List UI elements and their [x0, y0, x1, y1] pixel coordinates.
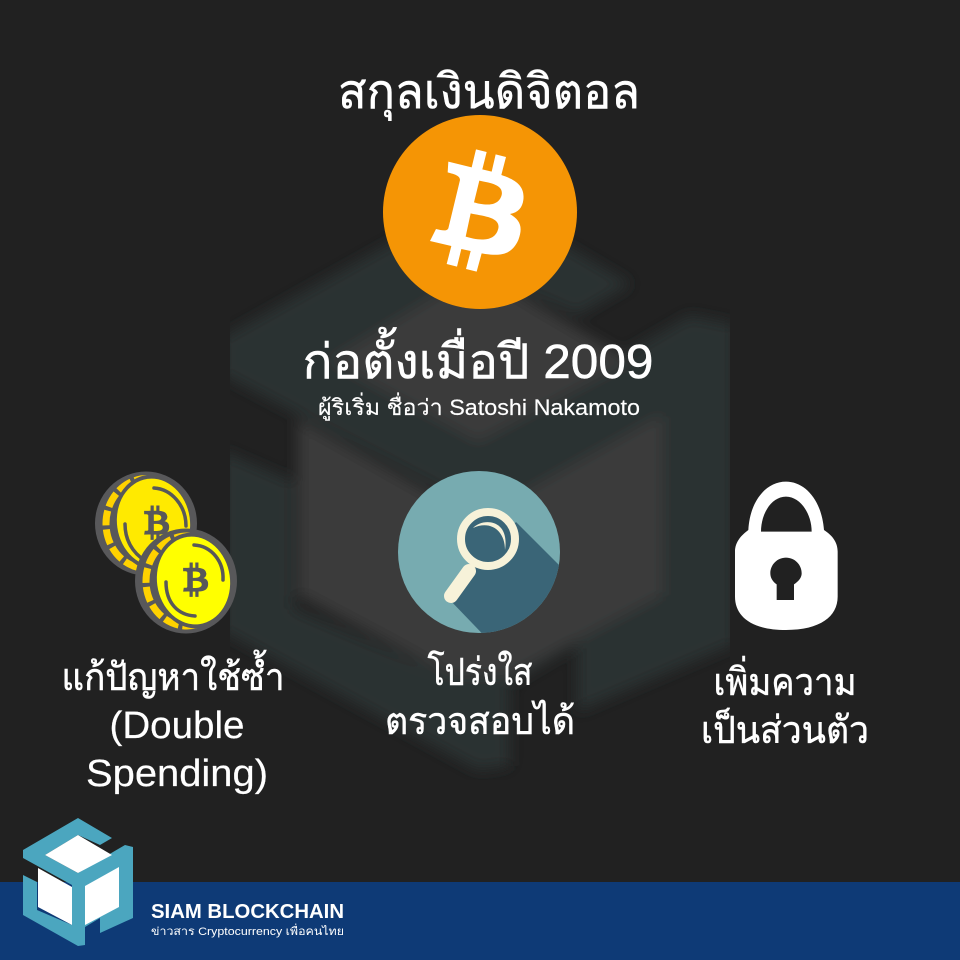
label: solves double spending: แก้ปัญหาใช้ซ้ำ: [62, 649, 284, 699]
footer text: [151, 901, 344, 938]
title: สกุลเงินดิจิตอล: [338, 66, 640, 121]
label: solves double spending: Spending): [86, 753, 268, 795]
panel: transparent: [385, 471, 575, 743]
background watermark: blurred cube logo: [230, 244, 730, 770]
label: solves double spending: [62, 649, 284, 795]
label: transparent, verifiable: [385, 650, 575, 743]
panel: double spending: [62, 469, 284, 795]
icon: magnifying glass: [398, 471, 560, 633]
label: increases privacy: เป็นส่วนตัว: [701, 707, 869, 752]
label: solves double spending: (Double: [110, 705, 244, 747]
footer text: ข่าวสาร Cryptocurrency เพื่อคนไทย: [151, 923, 344, 938]
label: transparent, verifiable: ตรวจสอบได้: [385, 700, 575, 743]
heading: founded in 2009: ก่อตั้งเมื่อปี 2009: [302, 327, 654, 389]
subheading: founder: ผู้ริเริ่ม ชื่อว่า Satoshi Nakamoto: [318, 392, 640, 421]
panel: privacy: [701, 482, 869, 752]
icon: padlock: [735, 482, 838, 630]
icon: gold coins: [95, 469, 240, 634]
footer text: SIAM BLOCKCHAIN: [151, 901, 344, 923]
footer band: [0, 882, 960, 960]
icon: bitcoin logo: [383, 115, 577, 309]
label: increases privacy: [701, 656, 869, 752]
label: transparent, verifiable: โปร่งใส: [428, 650, 532, 694]
footer logo: Siam Blockchain cube: [23, 818, 133, 946]
label: increases privacy: เพิ่มความ: [714, 656, 856, 704]
